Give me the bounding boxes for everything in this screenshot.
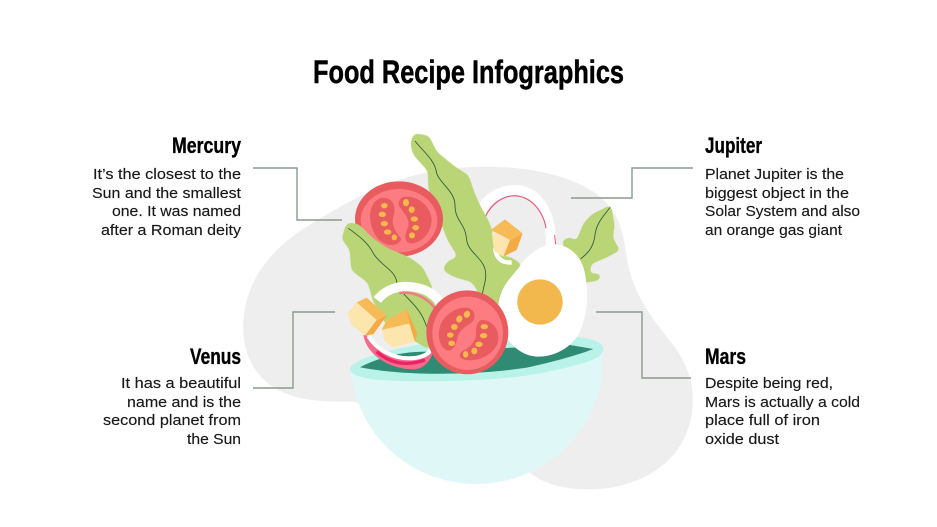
text block: Mars: place full of iron	[705, 413, 820, 429]
text block: Mercury: Sun and the smallest	[92, 186, 241, 202]
text block: Venus: It has a beautiful	[121, 376, 241, 392]
text block: Venus: second planet from	[103, 413, 241, 429]
text block: Jupiter: Solar System and also	[705, 204, 860, 220]
bowl inside	[360, 345, 593, 374]
illustration: salad bowl	[344, 136, 618, 484]
text block: Mars: Mars is actually a cold	[705, 395, 860, 411]
text block: Venus: Venus	[190, 344, 241, 369]
connector: Mars	[596, 312, 691, 378]
left cheese cube	[347, 298, 387, 336]
text block: Mars: Despite being red,	[705, 376, 833, 392]
text block: Venus	[103, 344, 241, 448]
big lettuce	[413, 136, 519, 303]
text block: Jupiter	[705, 133, 860, 239]
text block: Jupiter: Planet Jupiter is the	[705, 167, 844, 183]
connector: Mercury	[253, 168, 342, 220]
egg	[498, 244, 587, 357]
right lettuce	[563, 207, 618, 282]
text block: Mars	[705, 344, 860, 448]
text block: Jupiter: an orange gas giant	[705, 223, 842, 239]
onion curl	[495, 248, 512, 262]
bottom tomato	[426, 290, 508, 374]
text block: Jupiter: biggest object in the	[705, 186, 849, 202]
title: Food Recipe Infographics	[313, 54, 624, 90]
bowl body	[351, 350, 603, 484]
right cheese cube	[382, 309, 417, 348]
text block: Mercury: It’s the closest to the	[93, 167, 241, 183]
background blob	[243, 167, 693, 489]
text block: Mars: Mars	[705, 344, 746, 369]
bottom onion ring	[363, 287, 439, 369]
text block: Mercury: Mercury	[172, 133, 242, 158]
text block: Jupiter: Jupiter	[705, 133, 762, 158]
text block: Mercury: one. It was named	[112, 204, 241, 220]
text block: Venus: the Sun	[187, 432, 241, 448]
top onion ring	[481, 190, 556, 249]
top cheese cube	[491, 219, 523, 257]
text block: Mercury	[92, 133, 242, 239]
left lettuce	[344, 225, 436, 347]
text block: Venus: name and is the	[127, 395, 241, 411]
connector: Jupiter	[571, 168, 693, 198]
text block: Mars: oxide dust	[705, 432, 779, 448]
text block: Mercury: after a Roman deity	[101, 223, 242, 239]
top tomato	[355, 181, 443, 257]
connector: Venus	[253, 312, 335, 388]
bowl rim	[350, 337, 603, 381]
